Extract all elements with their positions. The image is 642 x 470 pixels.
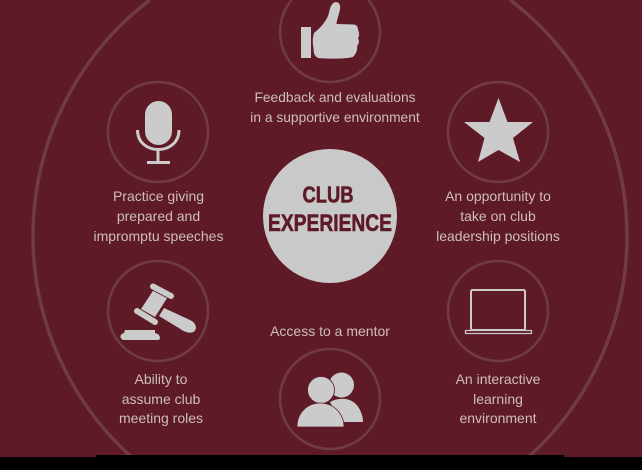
item: thumbs up feedback <box>250 0 420 125</box>
caption: roles: Ability to <box>135 371 188 387</box>
icon ring: feedback <box>280 0 380 82</box>
bottom black bar <box>0 455 642 470</box>
icon: two people <box>297 372 363 427</box>
icon ring: roles <box>108 261 208 361</box>
icon ring: speeches <box>108 82 208 182</box>
icon ring: mentor <box>280 349 380 449</box>
icon ring: leadership <box>448 82 548 182</box>
caption: leadership: take on club <box>460 208 536 224</box>
caption: learning: environment <box>459 410 537 426</box>
caption: feedback: in a supportive environment <box>250 110 420 125</box>
caption: learning: learning <box>473 391 523 407</box>
icon ring: learning <box>448 261 548 361</box>
center title: CLUB <box>302 182 354 208</box>
caption: roles: meeting roles <box>119 410 203 426</box>
item: mentor <box>270 323 390 449</box>
center circle <box>263 149 397 283</box>
item: gavel roles <box>108 261 208 426</box>
caption: leadership: An opportunity to <box>445 188 551 204</box>
icon: thumbs up <box>301 2 359 59</box>
item: laptop learning <box>448 261 548 426</box>
caption: speeches: prepared and <box>117 208 200 224</box>
item: star leadership <box>436 82 560 244</box>
caption: learning: An interactive <box>456 371 541 387</box>
item: microphone speeches <box>94 82 223 244</box>
caption: speeches: impromptu speeches <box>94 228 223 244</box>
caption: mentor: Access to a mentor <box>270 323 390 339</box>
icon: microphone <box>138 101 179 164</box>
icon: laptop <box>466 290 532 334</box>
icon: gavel <box>120 286 196 340</box>
center title: EXPERIENCE <box>268 210 392 237</box>
caption: roles: assume club <box>122 391 201 407</box>
caption: leadership: leadership positions <box>436 228 560 244</box>
caption: speeches: Practice giving <box>113 188 204 204</box>
caption: feedback: Feedback and evaluations <box>254 90 416 105</box>
icon: star <box>464 98 533 162</box>
